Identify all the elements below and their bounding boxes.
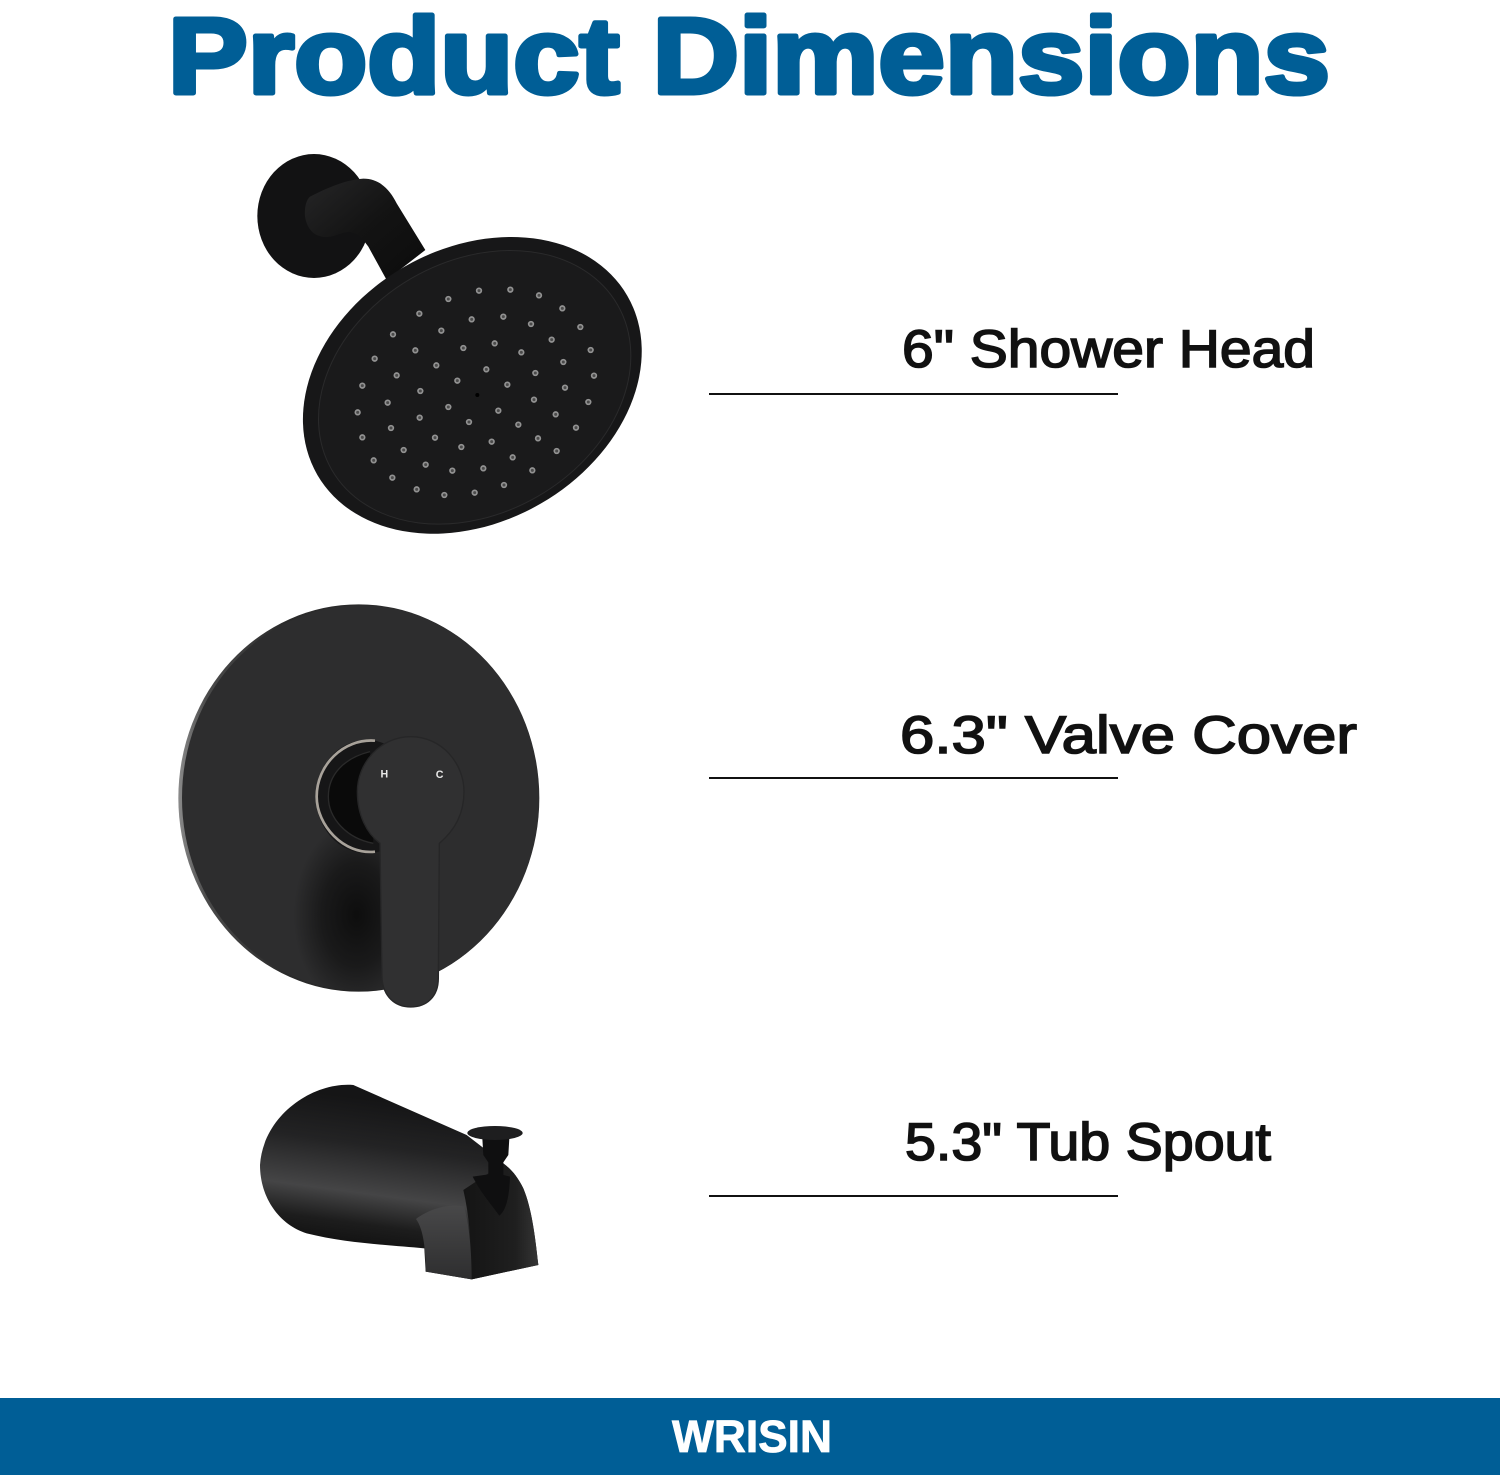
inner collar (328, 752, 373, 843)
cover rim (178, 604, 539, 992)
label: valve cover: 6.3" Valve Cover (900, 706, 1357, 765)
leader line: shower head (709, 393, 1118, 395)
nozzles (355, 287, 596, 497)
leader line: valve cover (709, 777, 1118, 779)
spout nose (416, 1206, 472, 1279)
diverter knob (467, 1126, 523, 1140)
spout front (463, 1163, 538, 1279)
handle label H: H (380, 768, 388, 780)
brand name: WRISIN (672, 1411, 832, 1462)
icon: shower head (249, 154, 696, 593)
leader line: tub spout (709, 1195, 1118, 1197)
diverter stem (473, 1138, 510, 1216)
valve collar (316, 740, 417, 853)
cover face (182, 605, 539, 991)
icon: tub spout (260, 1085, 538, 1279)
center dot (475, 393, 479, 397)
footer band (0, 1398, 1500, 1475)
shower arm (305, 179, 425, 280)
wall flange (257, 154, 371, 278)
shower face (249, 177, 696, 593)
handle label C: C (436, 769, 444, 781)
lever handle (357, 737, 464, 1007)
label: tub spout: 5.3" Tub Spout (905, 1113, 1271, 1172)
face inner ring (269, 196, 681, 579)
spout body (260, 1085, 538, 1279)
label: shower head: 6" Shower Head (902, 320, 1315, 379)
silver collar ring (317, 741, 375, 852)
shadow below handle (305, 844, 382, 992)
icon: valve cover with handle (178, 604, 539, 1008)
